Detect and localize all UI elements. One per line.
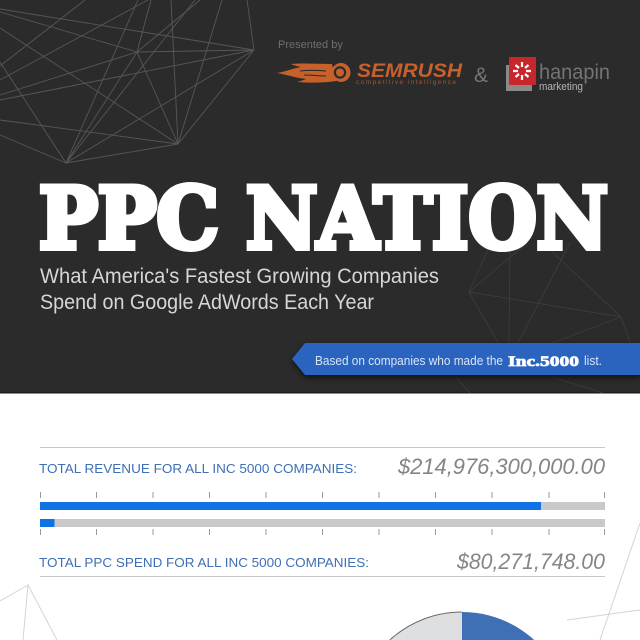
text: total revenue label: TOTAL REVENUE FOR ALL INC 5000 COMPANIES: <box>39 461 357 476</box>
subtitle <box>40 265 439 314</box>
text: total PPC label: TOTAL PPC SPEND FOR ALL INC 5000 COMPANIES: <box>39 555 369 570</box>
logo: semrush <box>277 61 463 86</box>
text: presented by: Presented by <box>278 39 343 51</box>
icon: semrush comet <box>277 63 350 83</box>
subtitle: Spend on Google AdWords Each Year <box>40 291 374 314</box>
network lines: top left <box>0 0 254 163</box>
callout: based on Inc. 5000 banner: Based on companies who made the <box>315 354 503 368</box>
callout: based on Inc. 5000 banner: list. <box>584 354 602 368</box>
bar: total PPC spend <box>40 519 605 527</box>
logo: hanapin marketing <box>506 57 610 93</box>
icon: hanapin red card <box>506 57 536 91</box>
title: PPC NATION <box>39 169 608 268</box>
text: semrush tagline: competitive intelligence <box>356 79 456 86</box>
callout: based on Inc. 5000 banner <box>292 343 640 378</box>
network lines: lower right <box>455 243 640 393</box>
text: marketing wordmark: marketing <box>539 81 583 93</box>
panel: revenue vs PPC comparison <box>39 447 606 577</box>
text: hanapin wordmark: hanapin <box>539 61 610 84</box>
text: total revenue value: $214,976,300,000.00 <box>397 454 606 479</box>
callout: based on Inc. 5000 banner: Inc.5000 <box>508 354 579 370</box>
text: ampersand: & <box>474 64 488 87</box>
ticks: lower scale <box>40 529 604 535</box>
text: semrush wordmark: SEMRUSH <box>357 61 463 82</box>
ticks: upper scale <box>40 492 604 498</box>
panel: dark header <box>0 0 640 394</box>
network lines: white section <box>0 523 640 640</box>
pie chart <box>390 612 534 640</box>
subtitle: What America's Fastest Growing Companies <box>40 265 439 288</box>
text: total PPC value: $80,271,748.00 <box>456 549 606 574</box>
bar: total revenue <box>40 502 605 510</box>
